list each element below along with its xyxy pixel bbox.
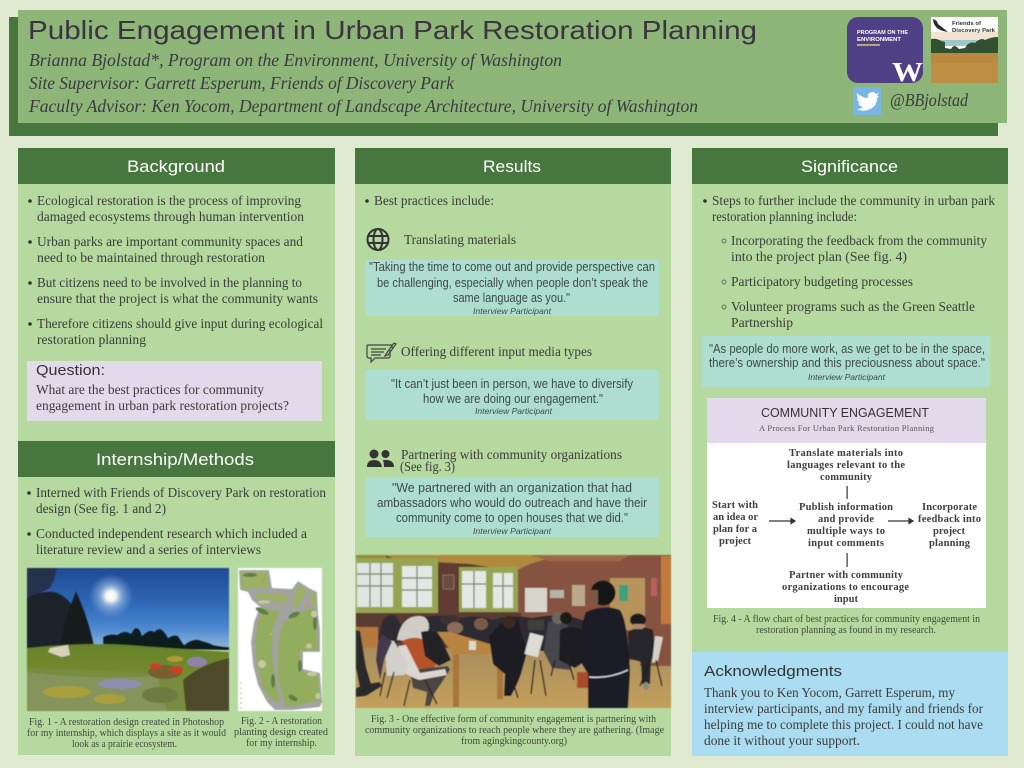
logo: Friends of Discovery Park [931, 17, 998, 83]
logo: Friends of Discovery Park: Friends of [952, 21, 981, 27]
acknowledgments text: done it without your support. [704, 734, 860, 749]
quote: media types: "It can’t just been in person, we have to diversify [391, 377, 634, 391]
background bullets: Therefore citizens should give input during ecological [37, 317, 323, 332]
twitter handle: @BBjolstad [890, 90, 968, 110]
heading: results [355, 148, 671, 184]
logo: Program on the Environment [847, 17, 923, 87]
background bullets: damaged ecosystems through human intervention [37, 210, 304, 225]
connector: translate to publish [846, 486, 848, 499]
heading: background: Background [127, 158, 225, 176]
practice: partnering [400, 448, 622, 475]
quote: translating: same language as you." [453, 291, 570, 305]
flow chart: community engagement [707, 398, 986, 608]
quote: partnering: ambassadors who would do outreach and have their [377, 496, 647, 510]
caption: figure 1 [27, 717, 227, 750]
caption: figure 2: planting design created [234, 727, 329, 738]
logo: Program on the Environment: ENVIRONMENT [857, 37, 902, 43]
caption: figure 4 [713, 614, 981, 636]
quote: partnering: community come to open houses that we did." [396, 511, 628, 525]
icon: people [367, 450, 394, 467]
acknowledgments text: helping me to complete this project. I could not have [704, 718, 983, 733]
caption: figure 4: Fig. 4 - A flow chart of best practices for community engagement in [713, 614, 981, 625]
logo: Friends of Discovery Park: Discovery Park [952, 28, 995, 34]
flow step: publish: Publish information [799, 502, 893, 513]
title banner [9, 10, 1007, 136]
flow step: incorporate: project [933, 526, 966, 537]
quote: partnering: "We partnered with an organization that had [392, 481, 632, 495]
logo: Program on the Environment: PROGRAM ON THE [857, 30, 908, 36]
flow step: incorporate: feedback into [918, 514, 981, 525]
background bullets [28, 194, 323, 348]
caption: figure 3: community organizations to reach people where they are gathering. (Image [365, 725, 664, 736]
results intro: Best practices include: [374, 194, 494, 209]
panel: acknowledgments [692, 652, 1008, 756]
heading: background [18, 148, 335, 184]
flow step: start: an idea or [713, 512, 758, 523]
flow step: partner [782, 570, 909, 605]
caption: figure 3 [365, 714, 664, 747]
authors [28, 50, 698, 116]
panel: significance [692, 148, 1008, 652]
quote: ownership: "As people do more work, as we get to be in the space, [709, 342, 985, 356]
flow step: publish: and provide [818, 514, 874, 525]
background bullets: Urban parks are important community spaces and [37, 235, 303, 250]
practice: partnering: Partnering with community organizations [401, 448, 622, 463]
flow step: start [712, 500, 758, 547]
flow step: incorporate: planning [929, 538, 971, 549]
authors: Brianna Bjolstad*, Program on the Environment, University of Washington [29, 50, 562, 70]
caption: figure 3: from agingkingcounty.org) [461, 736, 567, 747]
callout: question: What are the best practices for community [36, 383, 264, 398]
significance bullets [703, 194, 995, 331]
callout: question: engagement in urban park restoration projects? [36, 399, 289, 414]
flow step: incorporate: Incorporate [922, 502, 977, 513]
background bullets: restoration planning [37, 333, 146, 348]
connector: partner to publish [846, 553, 848, 567]
heading: acknowledgments: Acknowledgments [704, 663, 842, 680]
flow step: publish: multiple ways to [807, 526, 885, 537]
flow step: translate: community [820, 472, 873, 483]
arrow: publish to incorporate [888, 518, 913, 524]
flow step: translate: languages relevant to the [787, 460, 905, 471]
significance bullets: restoration planning include: [712, 210, 857, 225]
quote: ownership: Interview Participant [808, 372, 886, 382]
significance bullets: Incorporating the feedback from the community [731, 234, 987, 249]
callout: question: Question: [36, 362, 105, 379]
flow step: translate: Translate materials into [789, 448, 903, 459]
flow step: partner: organizations to encourage [782, 582, 909, 593]
flow step: publish: input comments [808, 538, 884, 549]
practice: input media types: Offering different input media types [401, 345, 592, 360]
significance bullets: into the project plan (See fig. 4) [731, 250, 907, 265]
methods bullets: design (See fig. 1 and 2) [36, 502, 166, 517]
flow step: start: plan for a [713, 524, 758, 535]
caption: figure 2: Fig. 2 - A restoration [241, 716, 323, 727]
flow step: translate [787, 448, 905, 483]
quote: media types: Interview Participant [475, 406, 553, 416]
methods bullets [27, 486, 326, 558]
background bullets: need to be maintained through restoration [37, 251, 265, 266]
icon: globe [368, 229, 388, 250]
heading: internship/methods: Internship/Methods [96, 451, 254, 469]
acknowledgments text: Thank you to Ken Yocom, Garrett Esperum, my [704, 686, 955, 701]
panel: results [355, 148, 671, 756]
panel: internship and methods [18, 441, 335, 755]
acknowledgments text [704, 686, 983, 749]
significance bullets: Partnership [731, 316, 793, 331]
caption: figure 2 [234, 716, 329, 749]
heading: results: Results [483, 158, 541, 176]
flow step: incorporate [918, 502, 981, 549]
heading: significance: Significance [801, 158, 898, 176]
significance bullets: Steps to further include the community in urban park [712, 194, 995, 209]
flow step: start: Start with [712, 500, 758, 511]
quote: ownership [702, 336, 990, 387]
significance bullets: Participatory budgeting processes [731, 275, 913, 290]
flow step: partner: input [834, 594, 858, 605]
quote: partnering [365, 477, 659, 537]
quote: translating: "Taking the time to come out and provide perspective can [369, 260, 655, 274]
logo: Program on the Environment: W [892, 57, 923, 87]
caption: figure 1: Fig. 1 - A restoration design created in Photoshop [29, 717, 224, 728]
quote: translating: Interview Participant [473, 306, 552, 316]
quote: partnering: Interview Participant [473, 526, 552, 536]
caption: figure 4: restoration planning as found in my research. [756, 625, 936, 636]
figure 2: planting plan [238, 568, 322, 711]
heading: internship/methods [18, 441, 335, 477]
flow chart: community engagement: A Process For Urban Park Restoration Planning [759, 423, 935, 433]
title: Public Engagement in Urban Park Restoration Planning [28, 15, 757, 45]
figure 1: prairie photo [27, 568, 229, 711]
arrow: start to publish [769, 518, 795, 524]
flow chart: community engagement: COMMUNITY ENGAGEMENT [761, 406, 929, 420]
flow step: start: project [719, 536, 752, 547]
quote: translating: be challenging, especially when people don’t speak the [377, 276, 648, 290]
callout: question [27, 361, 322, 421]
caption: figure 2: for my internship. [246, 738, 317, 749]
quote: media types: how we are doing our engagement." [423, 392, 603, 406]
flow step: publish [799, 502, 893, 549]
quote: translating [365, 260, 659, 316]
significance bullets: Volunteer programs such as the Green Seattle [731, 300, 975, 315]
authors: Faculty Advisor: Ken Yocom, Department of Landscape Architecture, University of Washington [28, 96, 698, 116]
quote: ownership: there’s ownership and this preciousness about space." [709, 356, 985, 370]
background bullets: But citizens need to be involved in the planning to [37, 276, 302, 291]
methods bullets: literature review and a series of interviews [36, 543, 261, 558]
caption: figure 3: Fig. 3 - One effective form of community engagement is partnering with [371, 714, 657, 725]
flow step: partner: Partner with community [789, 570, 904, 581]
methods bullets: Interned with Friends of Discovery Park on restoration [36, 486, 326, 501]
panel: background [18, 148, 335, 441]
acknowledgments text: interview participants, and my family and friends for [704, 702, 983, 717]
icon: twitter [853, 87, 881, 115]
practice: partnering: (See fig. 3) [400, 460, 455, 475]
figure 3: community meeting photo [356, 555, 671, 708]
practice: translating materials: Translating materials [404, 233, 516, 248]
heading: significance [692, 148, 1008, 184]
authors: Site Supervisor: Garrett Esperum, Friends of Discovery Park [29, 73, 455, 93]
caption: figure 1: for my internship, which displays a site as it would [27, 728, 227, 739]
caption: figure 1: look as a prairie ecosystem. [72, 739, 177, 750]
icon: speech bubble with pencil [367, 343, 396, 362]
background bullets: Ecological restoration is the process of improving [37, 194, 301, 209]
methods bullets: Conducted independent research which included a [36, 527, 308, 542]
quote: media types [365, 370, 659, 420]
background bullets: ensure that the project is what the community wants [37, 292, 318, 307]
